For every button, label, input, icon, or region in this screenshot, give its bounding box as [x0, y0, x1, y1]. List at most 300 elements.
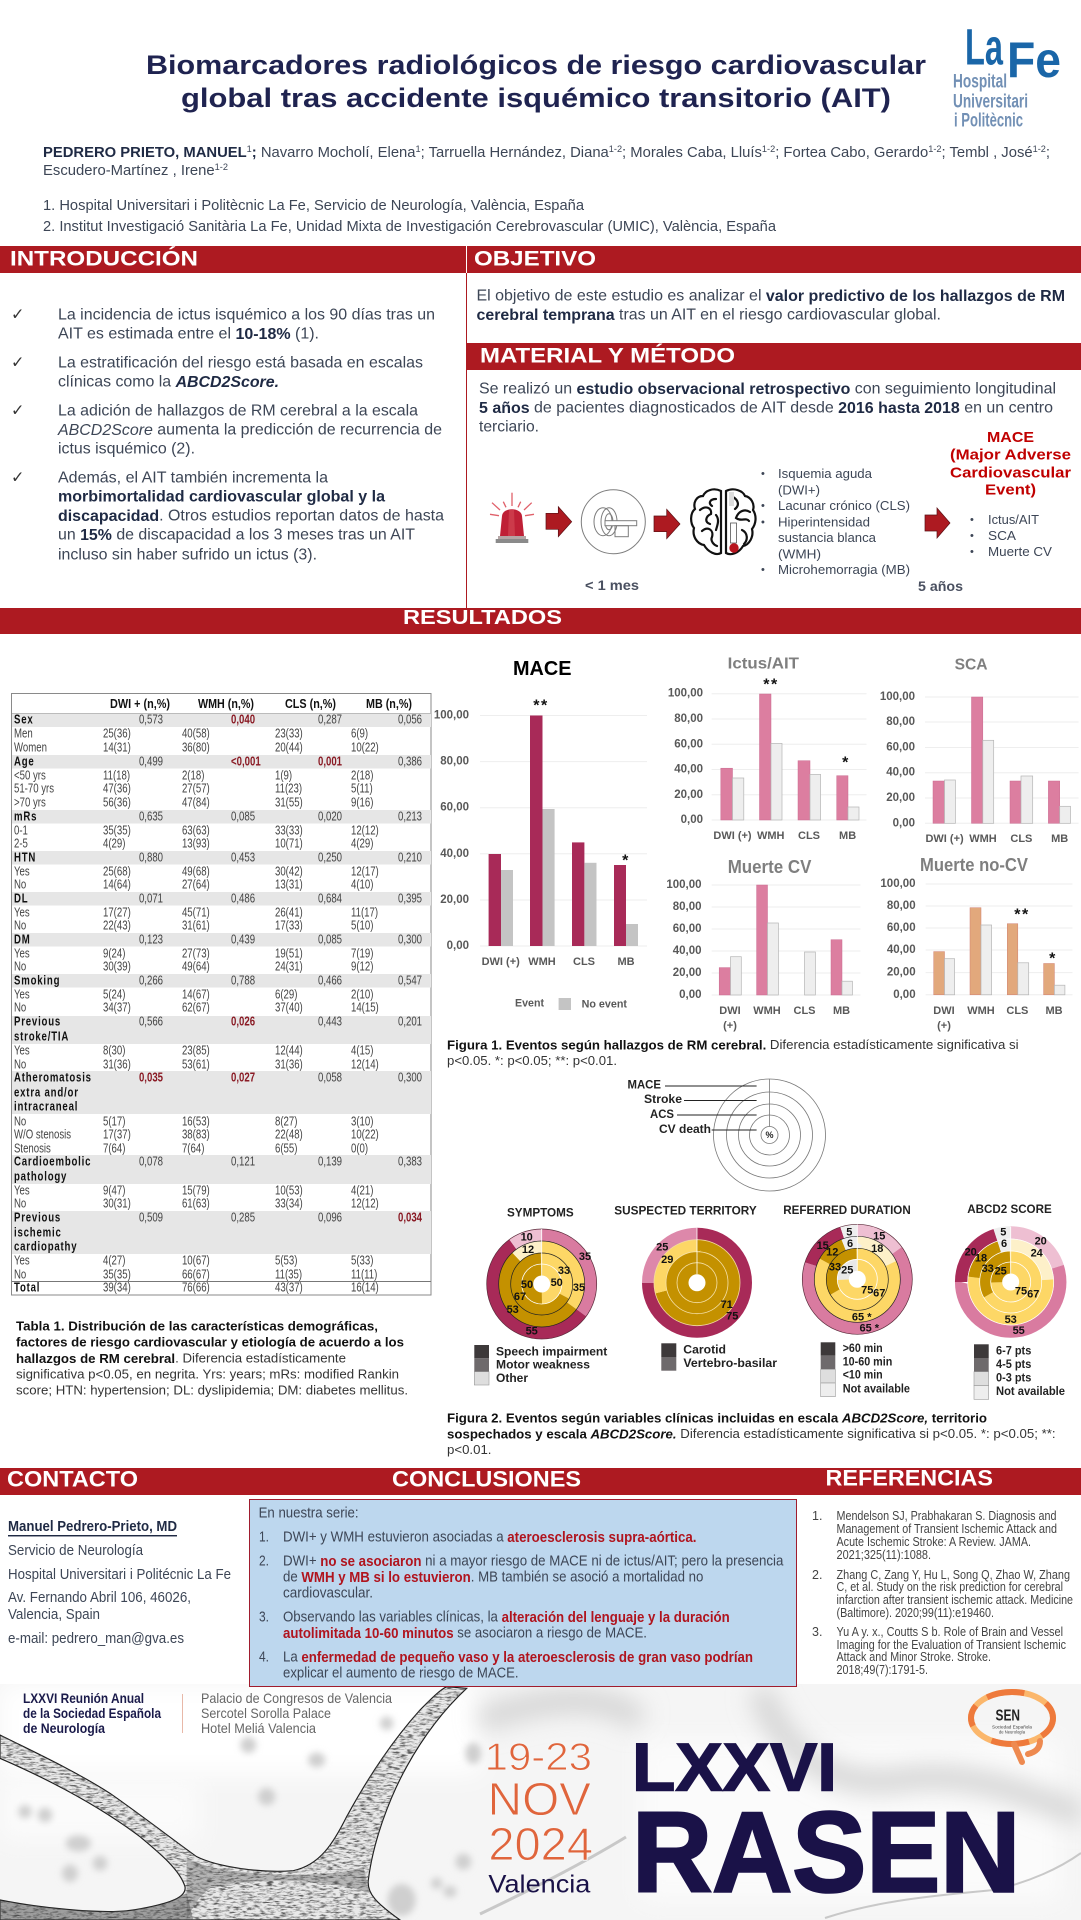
bullseye: ABCD2 score: 24: [1031, 1247, 1044, 1259]
bullseye: suspected territory: 25: [656, 1242, 668, 1254]
table 1: demographics: 0,300: [398, 1071, 422, 1085]
table 1: demographics: 0,573: [139, 713, 163, 727]
table 1: demographics: 0,788: [231, 974, 255, 988]
table 1: demographics: Age: [14, 755, 35, 769]
panel: introducción list: clínicas como la ABCD2Score.: [58, 374, 279, 390]
table 1: demographics: Yes: [14, 865, 30, 879]
heading: MACE definition: Cardiovascular: [950, 464, 1071, 482]
table 1: demographics: Atheromatosis: [14, 1071, 92, 1085]
panel: contact: Manuel Pedrero-Prieto, MD: [8, 1519, 177, 1535]
chart: Ictus/AIT: 40,00: [674, 764, 703, 776]
authors: 1-2: [609, 144, 622, 154]
figure 1 caption: Figura 1. Eventos según hallazgos de RM cerebral. Diferencia estadísticamente significativa si: [447, 1037, 1019, 1052]
authors: ; Morales Caba, Lluís: [622, 145, 762, 161]
list: imaging findings: [761, 467, 910, 577]
authors: 1-2: [762, 144, 775, 154]
table 1: demographics: 0,443: [318, 1015, 342, 1029]
header band: contacto, conclusiones, referencias: CONCLUSIONES: [392, 1466, 581, 1492]
bullseye: ABCD2 score: 20: [1035, 1235, 1047, 1247]
table 1: demographics: 0,040: [231, 713, 255, 727]
chart: Ictus/AIT: **: [763, 676, 779, 694]
authors: 1: [247, 144, 252, 154]
header band: objetivo: OBJETIVO: [474, 248, 596, 270]
chart: MACE: DWI (+): [482, 956, 520, 968]
table 1: demographics: 47(84): [182, 796, 210, 810]
table 1: demographics: 4(10): [351, 878, 374, 892]
table 1: demographics: 2(18): [351, 769, 374, 783]
bullseye: referred duration: 12: [826, 1247, 838, 1259]
list: MACE components: •: [970, 514, 974, 526]
authors: 1: [416, 144, 421, 154]
table 1: demographics: >70 yrs: [14, 796, 46, 810]
table 1: demographics: 76(66): [182, 1281, 210, 1295]
bullseye: ABCD2 score: ABCD2 SCORE: [967, 1202, 1052, 1216]
chart: MACE: MB: [617, 956, 635, 968]
chart: Muerte no-CV: **: [1014, 906, 1030, 924]
footer: dates: 19-23: [485, 1736, 592, 1779]
chart: SCA: [880, 656, 1079, 845]
bullseye: referred duration: 75: [861, 1285, 873, 1297]
chart: Muerte no-CV: 40,00: [887, 944, 916, 956]
panel: introducción list: ✓: [11, 400, 24, 420]
bullseye: suspected territory: Carotid: [683, 1345, 726, 1357]
table 1: demographics: 1(9): [275, 769, 292, 783]
table 1: demographics: 31(61): [182, 919, 210, 933]
bullseye: suspected territory: SUSPECTED TERRITORY: [614, 1204, 757, 1218]
table 1: demographics: 6(9): [351, 727, 368, 741]
panel: references: Acute Ischemic Stroke: A Review. JAMA.: [836, 1535, 1031, 1549]
bullseye: ABCD2 score: 20: [965, 1246, 977, 1258]
table 1: demographics: 14(64): [103, 878, 131, 892]
chart: Muerte CV: CLS: [794, 1005, 816, 1017]
table 1: demographics: 0,034: [398, 1211, 423, 1225]
bullseye: referred duration: [783, 1203, 912, 1397]
table 1: demographics: HTN: [14, 851, 36, 865]
authors: ; Fortea Cabo, Gerardo: [775, 145, 928, 161]
bullseye: ABCD2 score: 55: [1013, 1325, 1025, 1337]
table 1: demographics: 47(36): [103, 782, 131, 796]
icon: MRI scanner: [581, 490, 645, 554]
table 1: demographics: No: [14, 1058, 26, 1072]
chart: Muerte no-CV: CLS: [1006, 1005, 1028, 1017]
logo: SEN: [971, 1692, 1053, 1762]
table 1: demographics: 5(53): [275, 1254, 298, 1268]
panel: introducción list: morbimortalidad cardiovascular global y la: [58, 488, 385, 506]
table 1: demographics: 14(67): [182, 988, 210, 1002]
table 1: demographics: Cardioembolic: [14, 1155, 91, 1169]
table 1: demographics: 9(12): [351, 960, 374, 974]
table 1: demographics: 0,684: [318, 892, 343, 906]
table 1: demographics: cardiopathy: [14, 1240, 77, 1254]
table 1: demographics: [12, 694, 431, 1295]
chart: SCA: MB: [1051, 833, 1068, 845]
chart: Muerte CV: 60,00: [673, 923, 702, 935]
logo: SEN: de Neurología: [999, 1730, 1025, 1734]
bullseye: referred duration: REFERRED DURATION: [783, 1203, 911, 1217]
arrow: MRI to brain: [654, 509, 680, 539]
table 1: demographics: 63(63): [182, 824, 210, 838]
authors: ; Tembl , José: [942, 145, 1033, 161]
bullseye: symptoms: 50: [551, 1277, 563, 1289]
table 1: demographics: 0,285: [231, 1211, 255, 1225]
panel: conclusions: de WMH y MB si lo estuvieron. MB también se asoció a mortalidad no: [283, 1568, 703, 1586]
panel: introducción list: Además, el AIT también incrementa la: [58, 470, 328, 486]
table 1: demographics: 0,001: [318, 755, 343, 769]
bullseye: ABCD2 score: 75: [1015, 1286, 1027, 1298]
panel: conclusions: La enfermedad de pequeño vaso y la ateroesclerosis de gran vaso podrían: [283, 1648, 753, 1666]
diagram: bullseye key: MACE: [628, 1080, 661, 1092]
bullseye: ABCD2 score: 4-5 pts: [996, 1359, 1031, 1371]
panel: introducción list: La incidencia de ictus isquémico a los 90 días tras un: [58, 306, 435, 324]
table 1: demographics: 12(12): [351, 824, 379, 838]
list: imaging findings: •: [761, 500, 765, 512]
table 1: demographics: 7(19): [351, 947, 374, 961]
panel: introducción list: La adición de hallazgos de RM cerebral a la escala: [58, 402, 418, 420]
footer: congress name: LXXVI Reunión Anual: [23, 1690, 144, 1706]
table 1: demographics: 4(29): [351, 837, 374, 851]
chart: Muerte CV: 40,00: [673, 945, 702, 957]
panel: conclusions: 1.: [259, 1528, 269, 1546]
bullseye: symptoms: SYMPTOMS: [507, 1206, 574, 1220]
authors: ;: [1046, 145, 1050, 161]
table 1: demographics: 4(15): [351, 1044, 374, 1058]
chart: Ictus/AIT: 80,00: [674, 713, 703, 725]
logo: La Fe hospital: i Politècnic: [954, 110, 1023, 132]
chart: Ictus/AIT: WMH: [757, 830, 784, 842]
table 1: demographics: No: [14, 919, 26, 933]
bullseye: ABCD2 score: 0-3 pts: [996, 1372, 1031, 1384]
panel: references: 1.: [812, 1509, 822, 1523]
bullseye: symptoms: 55: [526, 1326, 538, 1338]
logo: SEN: SEN: [996, 1708, 1020, 1724]
table 1: demographics: 10(22): [351, 741, 379, 755]
list: imaging findings: •: [761, 468, 765, 480]
panel: contact: Av. Fernando Abril 106, 46026,: [8, 1590, 191, 1606]
table 1: demographics: <50 yrs: [14, 769, 46, 783]
chart: Ictus/AIT: *: [842, 754, 850, 772]
table 1: demographics: 26(41): [275, 906, 303, 920]
chart: Ictus/AIT: 100,00: [668, 688, 703, 700]
panel: material y método text: Se realizó un estudio observacional retrospectivo con seguimiento longitudinal: [479, 380, 1056, 398]
panel: references: (Baltimore). 2020;99(11):e19460.: [836, 1606, 994, 1620]
table 1: demographics: Yes: [14, 1254, 30, 1268]
header band: introducción: INTRODUCCIÓN: [10, 246, 198, 270]
table 1: demographics: 0,395: [398, 892, 422, 906]
panel: introducción list: discapacidad. Otros estudios reportan datos de hasta: [58, 508, 444, 524]
bullseye: suspected territory: [614, 1204, 778, 1371]
figure 1 caption: [447, 1037, 1019, 1068]
table 1: demographics: 0,035: [139, 1071, 164, 1085]
bullseye: referred duration: 6: [847, 1238, 853, 1250]
chart: Muerte CV: 80,00: [673, 901, 702, 913]
chart: Muerte no-CV: [880, 855, 1072, 1032]
panel: contact: e-mail: pedrero_man@gva.es: [8, 1631, 184, 1647]
table 1: demographics: W/O stenosis: [14, 1128, 71, 1142]
table 1: demographics: 5(33): [351, 1254, 374, 1268]
label: less than one month: < 1 mes: [585, 577, 639, 593]
chart: Muerte no-CV: 20,00: [887, 967, 916, 979]
table 1: demographics: 5(10): [351, 919, 374, 933]
table 1: demographics: 51-70 yrs: [14, 782, 54, 796]
table 1: demographics: 14(31): [103, 741, 131, 755]
logo: La Fe hospital: Hospital: [953, 72, 1007, 92]
table 1: demographics: 43(37): [275, 1281, 303, 1295]
table 1: demographics: 5(17): [103, 1115, 126, 1129]
list: imaging findings: sustancia blanca: [778, 531, 876, 545]
chart: MACE: 80,00: [440, 756, 469, 768]
header band: resultados: [0, 607, 1081, 634]
table 1 caption: Tabla 1. Distribución de las características demográficas,: [16, 1318, 378, 1334]
table 1: demographics: 23(85): [182, 1044, 210, 1058]
list: MACE components: •: [970, 546, 974, 558]
bullseye: ABCD2 score: 6: [1001, 1238, 1007, 1250]
footer: congress banner background with neuron: [0, 1680, 1081, 1920]
footer: city: Valencia: [488, 1871, 591, 1899]
bullseye: referred duration: Not available: [843, 1383, 910, 1395]
table 1: demographics: 35(35): [103, 824, 131, 838]
table 1: demographics: 0,300: [398, 933, 422, 947]
bullseye: symptoms: Speech impairment: [496, 1347, 607, 1359]
table 1: demographics: 39(34): [103, 1281, 131, 1295]
title: global tras accidente isquémico transitorio (AIT): [181, 83, 891, 113]
table 1: demographics: 10(53): [275, 1184, 303, 1198]
footer: venues: Sercotel Sorolla Palace: [201, 1705, 331, 1721]
table 1: demographics: 33(33): [275, 824, 303, 838]
table 1: demographics: pathology: [14, 1170, 67, 1184]
bullseye: suspected territory: Vertebro-basilar: [683, 1358, 778, 1370]
table 1: demographics: 8(27): [275, 1115, 298, 1129]
chart: Ictus/AIT: DWI (+): [713, 830, 752, 842]
header band: material y método: MATERIAL Y MÉTODO: [480, 344, 735, 368]
bullseye: referred duration: <10 min: [843, 1370, 883, 1382]
logo: SEN: Sociedad Española: [992, 1724, 1033, 1730]
table 1: demographics: mRs: [14, 810, 37, 824]
chart: SCA: 80,00: [886, 716, 915, 728]
table 1: demographics: 6(29): [275, 988, 298, 1002]
table 1: demographics: 0,439: [231, 933, 255, 947]
table 1: demographics: Yes: [14, 947, 30, 961]
table 1: demographics: 0,096: [318, 1211, 342, 1225]
list: MACE components: Ictus/AIT: [988, 513, 1039, 527]
table 1: demographics: 0,453: [231, 851, 255, 865]
bullseye: symptoms: 53: [507, 1304, 519, 1316]
table 1: demographics: 0,085: [231, 810, 255, 824]
table 1: demographics: 53(61): [182, 1058, 210, 1072]
chart: MACE: 20,00: [440, 894, 469, 906]
list: MACE components: [970, 513, 1053, 559]
table 1: demographics: 2-5: [14, 837, 28, 851]
panel: introducción list: ✓: [11, 468, 24, 486]
table 1: demographics: Total: [14, 1281, 40, 1295]
heading: MACE definition: Event): [985, 482, 1036, 498]
chart: SCA: SCA: [955, 656, 988, 674]
table 1: demographics: 27(57): [182, 782, 210, 796]
authors: [43, 144, 1050, 179]
authors: ; Tarruella Hernández, Diana: [421, 145, 610, 161]
chart: Muerte no-CV: MB: [1045, 1005, 1063, 1017]
list: imaging findings: (WMH): [778, 548, 821, 562]
panel: conclusions: 3.: [259, 1608, 269, 1626]
panel: introducción list: La estratificación del riesgo está basada en escalas: [58, 354, 423, 372]
chart: Muerte no-CV: 100,00: [880, 878, 916, 890]
chart: MACE: Event: [515, 998, 544, 1010]
table 1: demographics: Yes: [14, 1184, 30, 1198]
table 1: demographics: 0,383: [398, 1155, 422, 1169]
chart: Muerte CV: MB: [833, 1005, 850, 1017]
bullseye: ABCD2 score: 33: [982, 1263, 994, 1275]
heading: MACE definition: (Major Adverse: [950, 446, 1071, 464]
table 1: demographics: 0,635: [139, 810, 163, 824]
authors: PEDRERO PRIETO, MANUEL: [43, 145, 247, 161]
figure 2 caption: p<0.01.: [447, 1442, 492, 1457]
table 1: demographics: 11(35): [275, 1268, 302, 1282]
figure 1 caption: p<0.05. *: p<0.05; **: p<0.01.: [447, 1053, 617, 1068]
table 1: demographics: Men: [14, 727, 33, 741]
table 1: demographics: 11(17): [351, 906, 378, 920]
chart: Ictus/AIT: [668, 656, 866, 842]
table 1: demographics: 8(30): [103, 1044, 126, 1058]
table 1: demographics: 17(37): [103, 1128, 131, 1142]
footer: LXXVI RASEN: [632, 1729, 1020, 1917]
table 1: demographics: 25(36): [103, 727, 131, 741]
chart: Muerte CV: DWI: [719, 1005, 741, 1017]
table 1: demographics: 0,020: [318, 810, 342, 824]
table 1: demographics: Previous: [14, 1015, 61, 1029]
table 1: demographics: 0,201: [398, 1015, 422, 1029]
chart: MACE: WMH: [528, 956, 556, 968]
table 1: demographics: 2(18): [182, 769, 205, 783]
table 1: demographics: 6(55): [275, 1142, 298, 1156]
table 1: demographics: 0(0): [351, 1142, 368, 1156]
table 1: demographics: 35(35): [103, 1268, 131, 1282]
authors: ;: [252, 145, 257, 161]
chart: SCA: 0,00: [893, 817, 915, 829]
table 1: demographics: 0,250: [318, 851, 342, 865]
footer: congress name: de la Sociedad Española: [23, 1705, 161, 1721]
table 1: demographics: 0,210: [398, 851, 422, 865]
table 1: demographics: <0,001: [231, 755, 261, 769]
authors: Escudero-Martínez , Irene: [43, 163, 211, 179]
list: imaging findings: Microhemorragia (MB): [778, 563, 910, 577]
bullseye: symptoms: Other: [496, 1373, 529, 1385]
header band: contacto, conclusiones, referencias: [0, 1466, 1081, 1495]
chart: MACE: 40,00: [440, 848, 469, 860]
chart: Ictus/AIT: 20,00: [674, 789, 703, 801]
panel: conclusions: En nuestra serie:: [259, 1504, 359, 1522]
icon: brain: [691, 489, 756, 554]
table 1: demographics: 3(10): [351, 1115, 374, 1129]
table 1: demographics: 9(16): [351, 796, 374, 810]
footer: congress name: [23, 1690, 161, 1736]
bullseye: referred duration: 18: [871, 1243, 883, 1255]
bullseye: ABCD2 score: 6-7 pts: [996, 1345, 1031, 1357]
bullseye: referred duration: 25: [841, 1265, 853, 1277]
table 1: demographics: 4(27): [103, 1254, 126, 1268]
bullseye: symptoms: 67: [514, 1291, 526, 1303]
chart: SCA: 100,00: [880, 691, 915, 703]
panel: introducción list: ✓: [11, 304, 24, 324]
panel: contact: Servicio de Neurología: [8, 1543, 144, 1559]
panel: conclusions: 2.: [259, 1552, 269, 1570]
chart: Muerte CV: 100,00: [666, 879, 702, 891]
chart: Muerte CV: [666, 857, 860, 1032]
panel: material y método text: 5 años de pacientes diagnosticados de AIT desde 2016 hasta 2018 en un centro: [479, 400, 1053, 416]
table 1: demographics: Yes: [14, 1044, 30, 1058]
footer: venues: [201, 1690, 392, 1736]
table 1: demographics: No: [14, 960, 26, 974]
list: imaging findings: •: [761, 564, 765, 576]
table 1: demographics: 66(67): [182, 1268, 210, 1282]
table 1: demographics: 0,486: [231, 892, 255, 906]
chart: Muerte CV: (+): [723, 1020, 737, 1032]
figure 2 caption: [447, 1410, 1056, 1457]
panel: introducción list: incluso sin haber sufrido un ictus (3).: [58, 546, 317, 564]
label: five years: 5 años: [918, 578, 963, 594]
heading: MACE definition: [950, 429, 1071, 498]
bullseye: symptoms: 35: [573, 1282, 585, 1294]
chart: MACE: 100,00: [434, 710, 469, 722]
chart: Muerte CV: 0,00: [679, 989, 702, 1001]
table 1: demographics: 10(22): [351, 1128, 379, 1142]
bullseye: ABCD2 score: 5: [1000, 1226, 1006, 1238]
title: [146, 50, 927, 113]
diagram: bullseye key: ACS: [650, 1109, 674, 1121]
bullseye: suspected territory: 71: [721, 1299, 733, 1311]
table 1: demographics: No: [14, 1197, 26, 1211]
panel: objetivo text: cerebral temprana tras un AIT en el riesgo cardiovascular global.: [476, 306, 941, 324]
table 1: demographics: 0,058: [318, 1071, 342, 1085]
table 1: demographics: 0,071: [139, 892, 163, 906]
bullseye: referred duration: 33: [829, 1262, 841, 1274]
table 1: demographics: 33(34): [275, 1197, 303, 1211]
bullseye: referred duration: 10-60 min: [843, 1357, 892, 1369]
table 1: demographics: 11(11): [351, 1268, 377, 1282]
bullseye: ABCD2 score: 53: [1005, 1314, 1017, 1326]
table 1 caption: score; HTN: hypertension; DL: dyslipidemia; DM: diabetes mellitus.: [16, 1382, 408, 1398]
table 1: demographics: 9(24): [103, 947, 126, 961]
table 1: demographics: MB (n,%): [366, 697, 412, 711]
table 1: demographics: Yes: [14, 988, 30, 1002]
table 1: demographics: 0-1: [14, 824, 28, 838]
logo: La Fe hospital: Fe: [1007, 32, 1061, 88]
chart: SCA: DWI (+): [925, 833, 964, 845]
footer: dates: 2024: [488, 1818, 593, 1870]
table 1: demographics: 10(71): [275, 837, 303, 851]
table 1: demographics: No: [14, 1268, 26, 1282]
panel: introducción list: ABCD2Score aumenta la predicción de recurrencia de: [57, 422, 442, 438]
table 1: demographics: DWI + (n,%): [110, 697, 170, 711]
table 1: demographics: 0,880: [139, 851, 163, 865]
chart: MACE: 0,00: [447, 940, 469, 952]
list: imaging findings: Hiperintensidad: [778, 516, 870, 530]
panel: introducción list: AIT es estimada entre el 10-18% (1).: [58, 326, 319, 342]
table 1: demographics: 0,121: [231, 1155, 255, 1169]
table 1: demographics: 31(55): [275, 796, 303, 810]
affiliations: 2. Institut Investigació Sanitària La Fe, Unidad Mixta de Investigación Cerebrovascular (UMIC), València, España: [43, 219, 777, 235]
table 1: demographics: No: [14, 1001, 26, 1015]
panel: introducción list: ictus isquémico (2).: [58, 440, 195, 458]
table 1: demographics: 31(36): [103, 1058, 131, 1072]
table 1: demographics: 0,509: [139, 1211, 163, 1225]
table 1: demographics: 37(40): [275, 1001, 303, 1015]
chart: Muerte no-CV: 0,00: [893, 989, 916, 1001]
header band: contacto, conclusiones, referencias: REFERENCIAS: [826, 1466, 993, 1490]
logo: La Fe hospital: Universitari: [953, 92, 1028, 112]
chart: Muerte no-CV: 80,00: [887, 900, 916, 912]
list: imaging findings: •: [761, 516, 765, 528]
arrow: alarm to MRI: [546, 507, 572, 537]
logo: La Fe hospital: [953, 18, 1061, 132]
